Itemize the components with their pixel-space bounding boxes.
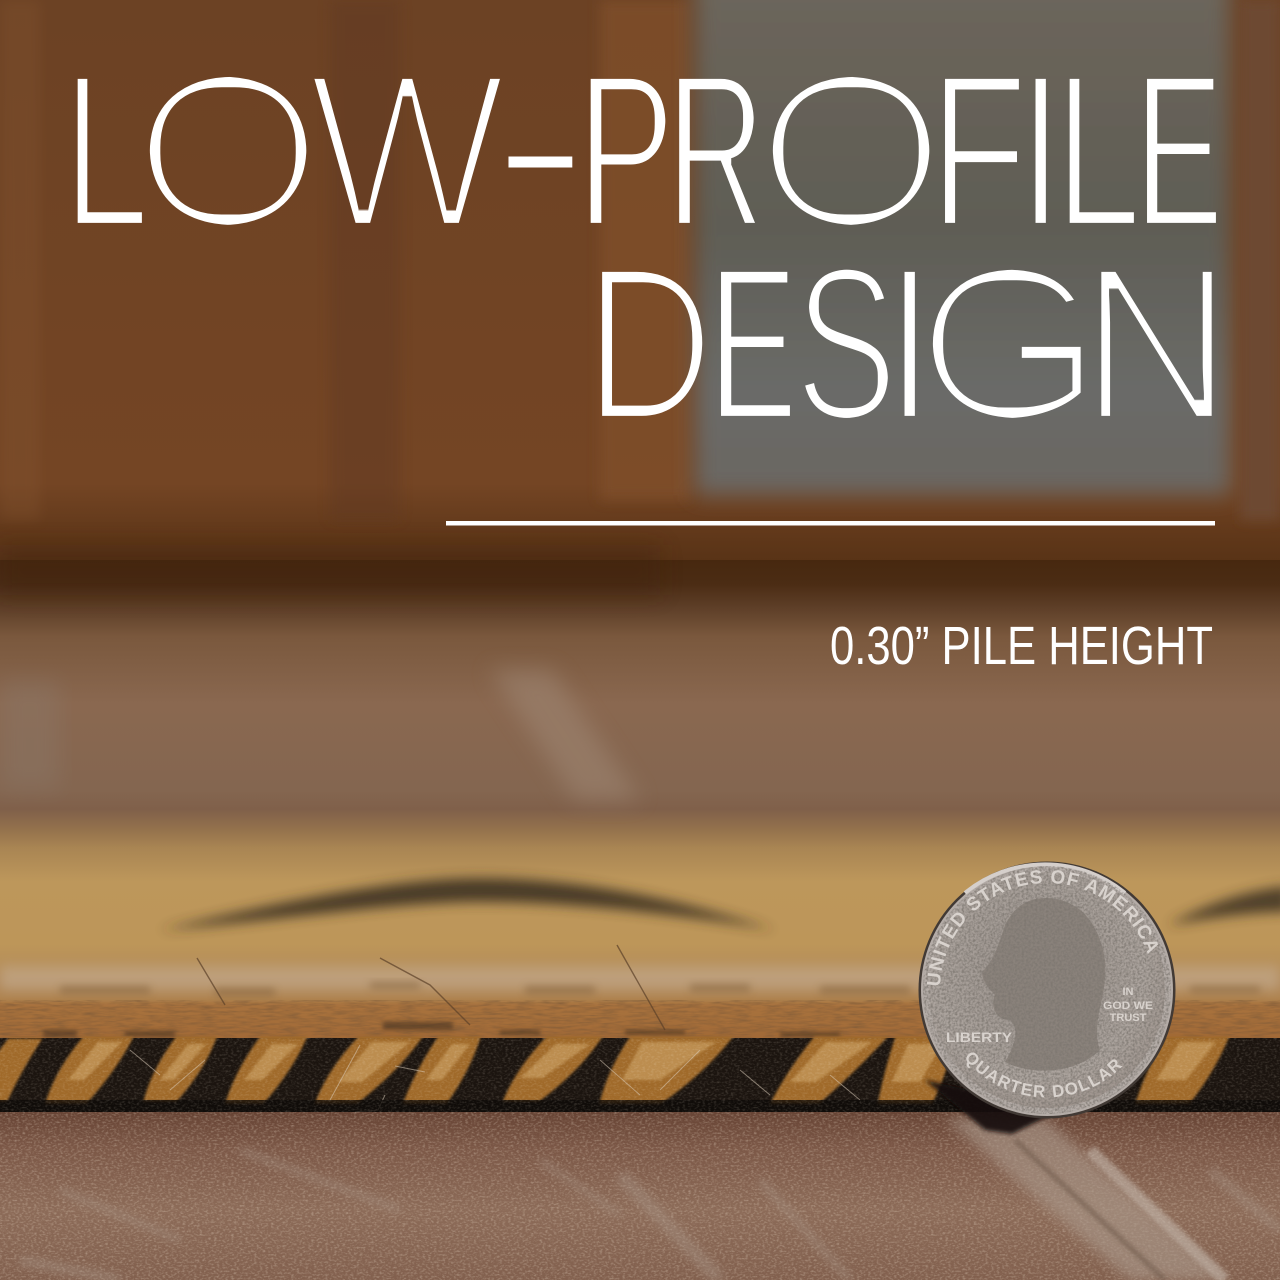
blurred background wall [0,0,1280,620]
title line 1: R [667,30,765,273]
title line 1: W [307,29,507,273]
coin motto text: GOD WE [1103,1000,1153,1012]
divider rule [446,521,1215,526]
coin: US quarter [918,862,1176,1118]
title line 2: D [584,223,714,466]
title line 2: N [1079,222,1234,465]
wood floor planks [0,1105,1280,1280]
coin contact shadow [925,1080,1060,1134]
title line 2: I [879,223,940,466]
coin motto text: IN [1122,986,1134,998]
title line 1: E [1135,29,1223,273]
Washington profile [982,898,1105,1071]
title line 1: F [929,28,1028,273]
title line 2 [584,222,1234,466]
title line 2: S [795,222,897,465]
coin liberty text: LIBERTY [946,1029,1013,1045]
rope lighter highlights [68,1042,1216,1082]
title line 2: G [914,222,1106,466]
title line 1: O [132,28,325,273]
braided rug edge rope [0,1038,1280,1112]
coin surface speckle [920,862,1174,1116]
title line 1: L [62,30,150,273]
coin legend bottom: QUARTER DOLLAR [966,1052,1122,1098]
rope tan braids [0,1040,1224,1100]
coin motto text: TRUST [1110,1012,1147,1024]
title line 1: O [754,28,948,273]
blurred floor and rug field [0,545,1280,1040]
blurred rug light stripe [0,966,1280,996]
title line 1: P [577,30,675,273]
title line 2: E [709,222,797,466]
title line 1 [62,23,1223,273]
rug surface fibres [0,945,1280,1046]
coin legend top: UNITED STATES OF AMERICA [926,870,1158,986]
coin rim highlights [965,864,1125,893]
title line 1: - [480,23,600,267]
rope stray fibres [130,1045,860,1112]
title line 1: I [1010,30,1071,273]
blurred rug chevron marks [160,878,1280,930]
title line 1: L [1054,30,1142,273]
